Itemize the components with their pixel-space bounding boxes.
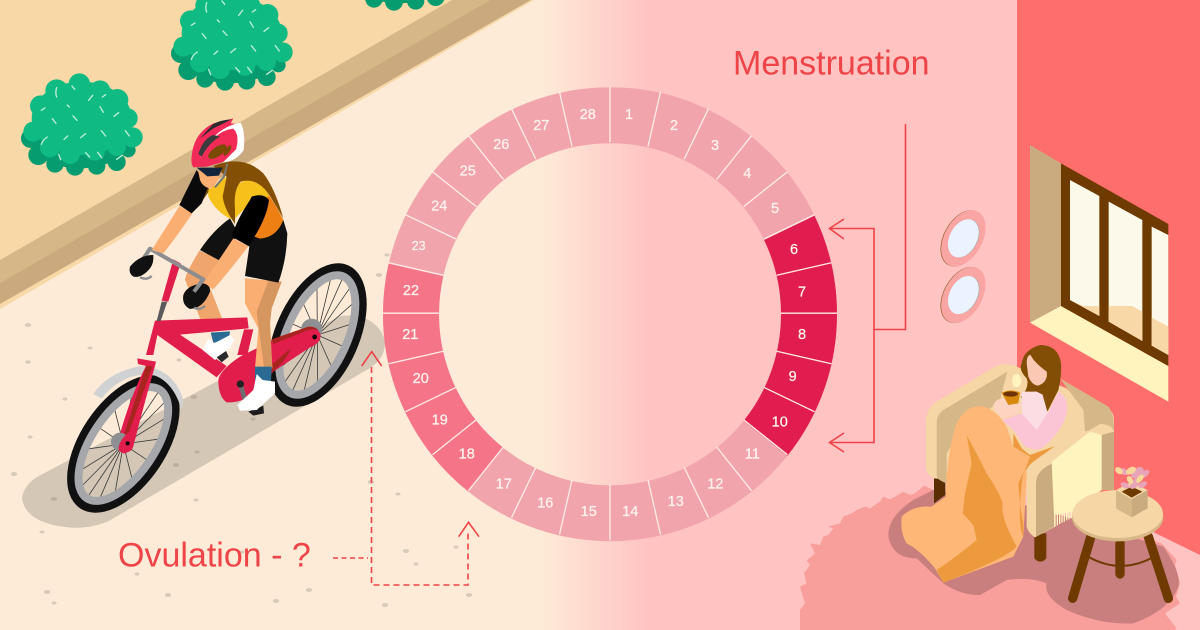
rear wheel [254,254,381,416]
right shoe and sock [255,367,272,383]
left shoe and sock [211,331,230,343]
cushion [1003,370,1085,443]
chair and stool shadow [888,490,1179,623]
curb edge highlight [0,0,534,309]
heading: Menstruation: Menstruation [733,44,930,82]
day numbers: 8 [798,327,806,343]
day numbers: 28 [580,107,596,123]
bicycle [50,249,381,526]
armchair back [926,364,1114,490]
stool [1072,490,1168,598]
chair arm [1027,424,1114,537]
gloves on handlebar [130,255,210,309]
ring segments: menstruation days 6-10 [411,115,809,513]
hair [213,161,283,224]
stool legs [1073,537,1168,598]
curb: dark band [0,0,531,305]
day numbers: 7 [798,284,806,300]
window frame [1061,163,1168,366]
cycle ring [383,86,837,540]
round mirrors on the wall [931,203,995,331]
heading: Ovulation: Ovulation - ? [118,536,311,574]
seat tube [237,329,253,355]
day numbers [402,107,806,520]
bush: top right [340,0,462,11]
room scene [800,345,1180,630]
woman's face [1027,355,1047,386]
day numbers: 17 [496,476,512,492]
day numbers: 18 [459,446,475,462]
bicycle shadow [22,316,385,528]
hair behind [190,177,210,208]
day numbers: 21 [402,327,418,343]
helmet [191,118,244,167]
ring segments: pale days [411,115,809,513]
stem [157,302,167,321]
day numbers: 25 [460,164,476,180]
day numbers: 23 [412,239,426,253]
shorts [200,218,238,262]
handlebar [141,249,203,292]
day numbers: 2 [670,118,678,134]
blanket fold shadow [937,435,1017,583]
rear hub [301,319,322,340]
front fork [118,358,156,453]
stool top [1072,493,1163,541]
hair lock over shoulder [1043,377,1058,412]
right lower leg [245,278,282,368]
woman's sleeve [1002,392,1067,449]
cyclist upper body [152,118,287,289]
day numbers: 10 [772,414,788,430]
flower pot [1114,465,1151,517]
ground speckles [11,253,472,607]
day numbers: 24 [431,198,447,214]
day numbers: 16 [537,496,553,512]
woman's torso [1022,392,1058,435]
day numbers: 13 [668,494,684,510]
chain guard [218,327,321,402]
window reveal [1030,145,1061,323]
day numbers: 19 [432,412,448,428]
frame [146,317,249,377]
left arm [152,206,192,253]
arrows: ovulation dashed lines [333,352,479,585]
day numbers: 9 [789,369,797,385]
left leg [185,251,223,320]
ring segments: days 18-22 [411,115,809,513]
jersey yellow [208,177,269,220]
face and sunglasses [198,170,222,188]
day numbers: 26 [493,137,509,153]
right arm [203,238,248,289]
throw on arm [1052,432,1102,515]
day numbers: 27 [533,118,549,134]
jersey orange [245,187,283,239]
day numbers: 11 [745,446,760,462]
curb: light band [0,0,490,283]
day numbers: 15 [581,504,597,520]
window [1030,145,1168,402]
day numbers: 20 [413,371,429,387]
window panes [1070,180,1168,355]
woman's hair [1021,345,1061,412]
arrows: menstruation bracket [830,124,906,452]
chair legs [934,478,945,503]
front wheel [50,362,196,526]
day numbers: 6 [790,242,798,258]
day numbers: 4 [743,166,751,182]
day numbers: 14 [622,504,638,520]
bush: centre [171,0,293,91]
day numbers: 1 [625,107,633,123]
hand and mug [993,398,1022,418]
ring dividers [383,86,837,540]
day numbers: 22 [403,283,419,299]
front fender [93,366,183,410]
day numbers: 3 [711,138,719,154]
right-side wall [1017,0,1200,555]
armchair inner panels [937,372,1007,483]
window sill [1030,306,1168,402]
bush: left [21,73,143,176]
shaggy rug [800,486,1180,630]
raised sidewalk: top surface [0,0,530,303]
day numbers: 5 [771,201,779,217]
view of floor through panes [1070,300,1168,355]
day numbers: 12 [707,476,723,492]
blanket [901,406,1030,583]
